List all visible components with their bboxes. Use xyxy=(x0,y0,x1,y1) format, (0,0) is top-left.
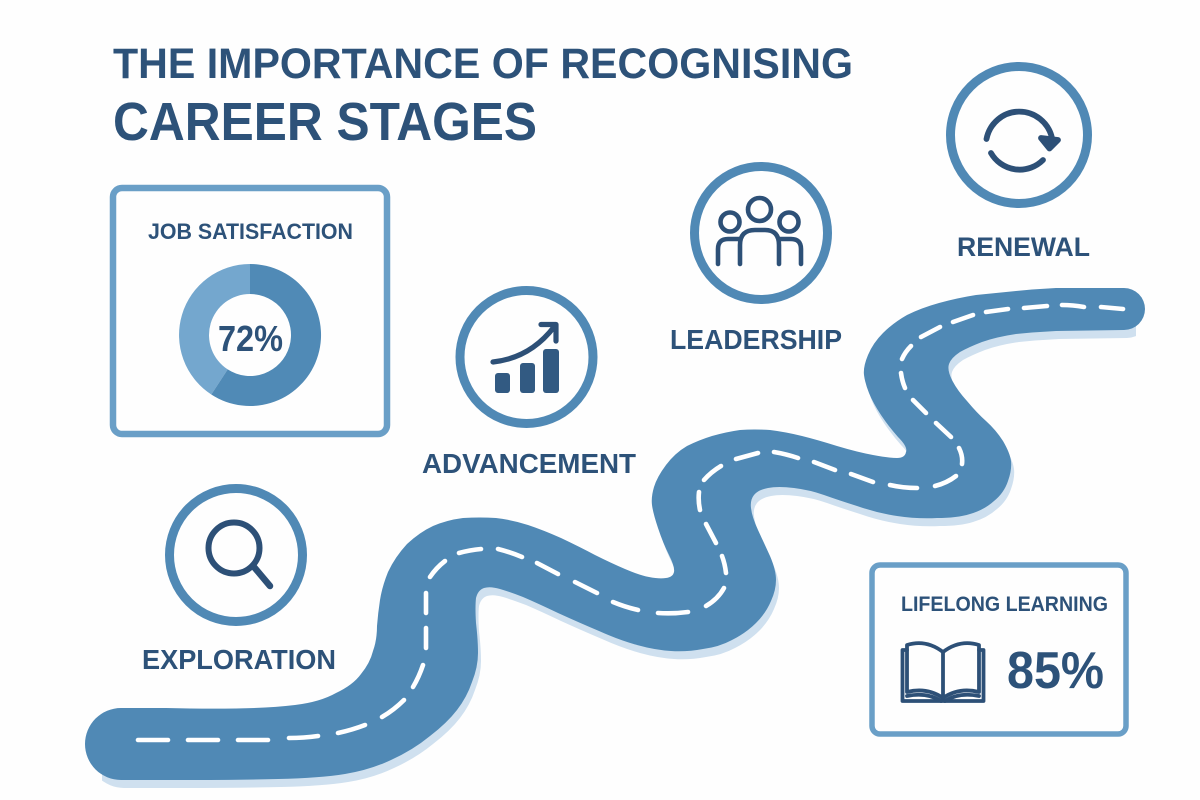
stage: renewal xyxy=(950,66,1090,262)
stage: advancement xyxy=(422,290,636,479)
panel: lifelong learning xyxy=(872,565,1126,734)
panel heading: LIFELONG LEARNING xyxy=(901,592,1108,616)
advancement ring xyxy=(460,290,593,424)
leadership label: LEADERSHIP xyxy=(670,324,842,355)
title: CAREER STAGES xyxy=(113,92,537,152)
title: THE IMPORTANCE OF RECOGNISING xyxy=(113,40,853,88)
icon: rising bar chart with arrow xyxy=(493,324,559,393)
stage: leadership xyxy=(670,166,842,355)
donut value: 72% xyxy=(218,318,283,359)
road surface xyxy=(85,288,1145,780)
icon: group of people xyxy=(718,198,801,264)
renewal label: RENEWAL xyxy=(957,232,1090,262)
title xyxy=(113,40,853,152)
advancement label: ADVANCEMENT xyxy=(422,448,636,479)
panel border xyxy=(113,188,387,434)
icon: magnifying glass xyxy=(208,522,270,586)
donut remainder segment xyxy=(179,264,250,394)
icon: circular arrow xyxy=(986,112,1058,170)
learning value: 85% xyxy=(1007,642,1104,700)
winding career road xyxy=(85,288,1148,788)
donut chart xyxy=(179,264,321,406)
icon: open book xyxy=(902,643,984,701)
panel: job satisfaction xyxy=(113,188,387,434)
exploration label: EXPLORATION xyxy=(142,644,336,675)
donut main segment xyxy=(211,264,321,406)
panel heading: JOB SATISFACTION xyxy=(148,219,353,244)
stage: exploration xyxy=(142,488,336,675)
exploration ring xyxy=(170,488,302,622)
panel border xyxy=(872,565,1126,734)
road centre dashes xyxy=(138,305,1123,740)
renewal ring xyxy=(950,66,1088,204)
road shadow xyxy=(88,296,1148,788)
leadership ring xyxy=(694,166,828,300)
